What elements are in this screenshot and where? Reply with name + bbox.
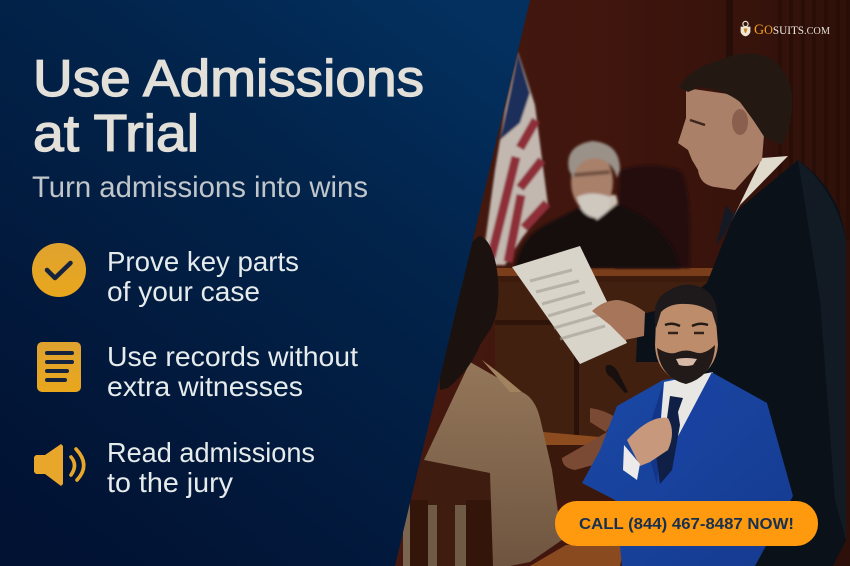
text: use records without extra witnesses <box>107 341 358 402</box>
call to action button: CALL (844) 467-8487 NOW! <box>579 516 794 533</box>
judge <box>515 141 680 268</box>
text: use records without extra witnesses: extra witnesses <box>107 371 303 402</box>
text: prove key parts of your case: Prove key parts <box>107 246 299 277</box>
text: read admissions to the jury: Read admissions <box>107 437 315 468</box>
judge's chair <box>615 165 690 268</box>
item 1: prove key parts <box>32 243 299 307</box>
left navy panel <box>0 0 530 566</box>
text: read admissions to the jury: to the jury <box>107 467 233 498</box>
title: at Trial <box>33 105 199 163</box>
text: prove key parts of your case: of your case <box>107 276 260 307</box>
icon: check mark badge <box>32 243 86 297</box>
lawyer's hand <box>592 300 645 340</box>
table edge <box>530 545 625 566</box>
bench rail and microphone <box>543 365 628 500</box>
lawyer's second hand <box>562 408 615 470</box>
courtroom background <box>395 0 850 566</box>
seated woman in tan jacket <box>424 236 562 566</box>
title <box>33 50 424 163</box>
item 3: read admissions <box>34 437 315 498</box>
logo text: GOSUITS.COM <box>754 22 830 38</box>
logo <box>741 21 830 38</box>
icon: lock shield <box>741 21 750 36</box>
chair slats <box>403 460 498 566</box>
icon: speaker <box>34 444 84 486</box>
document in lawyer's hand <box>512 246 627 364</box>
call to action button <box>555 501 818 546</box>
icon: document <box>37 342 81 392</box>
standing lawyer <box>636 53 846 566</box>
item 2: use records <box>37 341 358 402</box>
title: Use Admissions <box>33 50 424 108</box>
subtitle: Turn admissions into wins <box>32 171 368 204</box>
text: use records without extra witnesses: Use records without <box>107 341 358 372</box>
text: read admissions to the jury <box>107 437 315 498</box>
attorney portrait <box>582 284 793 566</box>
American flag <box>482 52 548 265</box>
text: prove key parts of your case <box>107 246 299 307</box>
